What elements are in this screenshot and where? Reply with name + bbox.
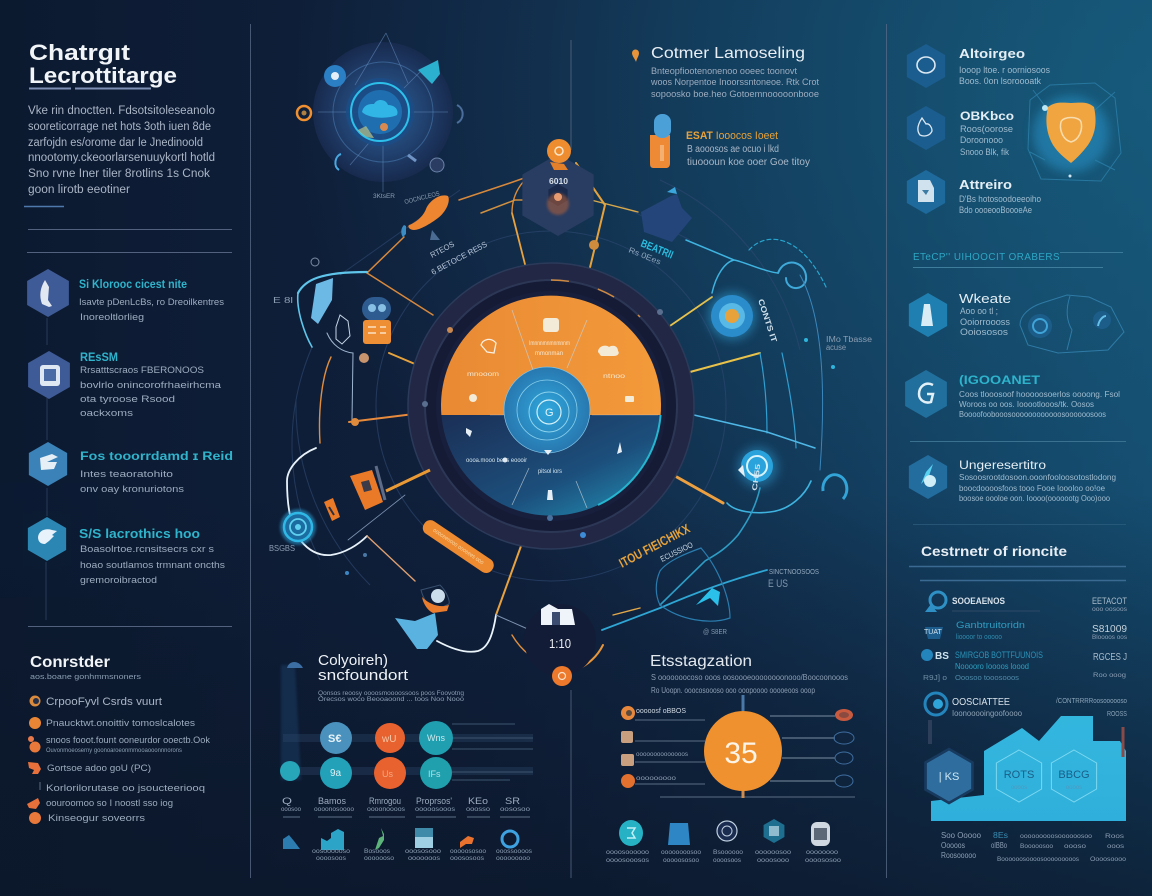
bottom icons: Bsoooooo xyxy=(713,849,743,856)
icon row xyxy=(283,828,533,862)
blue lower half xyxy=(441,415,661,516)
gauge rows: ooooooooo xyxy=(636,775,676,782)
panel: left intro xyxy=(24,40,232,252)
feature: Attreiro: Attreiro xyxy=(959,178,1012,192)
icon: orange capsule xyxy=(650,114,671,168)
table rows: EETACOT xyxy=(1092,596,1127,607)
shield network xyxy=(1028,83,1121,181)
table rows: BS xyxy=(935,651,949,662)
orange wedge icons: mnooom xyxy=(467,372,499,378)
body xyxy=(650,66,819,99)
icon row: ooososooo xyxy=(405,848,441,855)
panel: consider checklist xyxy=(27,654,210,824)
checklist items: Korlorilorutase oo jsoucteeriooq xyxy=(46,783,205,793)
orange note xyxy=(686,130,810,168)
table rows: lioooor to ooooo xyxy=(956,634,1002,641)
node: top right trapezoid: BEATRII xyxy=(639,238,675,262)
node: house and ratio xyxy=(524,604,596,686)
node: right glowing orb: CONTS IT xyxy=(756,298,779,344)
labels: lower right cluster: SINCTNOOSOOS xyxy=(769,569,819,576)
stat labels xyxy=(281,796,530,817)
checklist items xyxy=(27,696,210,824)
icon row: ooososoos xyxy=(450,855,485,862)
node: orange pill: oooceenooo oooeees ooo xyxy=(431,528,485,567)
table rows: Nooooro Ioooos loood xyxy=(955,662,1029,671)
chart footer: ooos xyxy=(1107,843,1125,850)
stat labels: Proprsos' xyxy=(416,796,452,806)
big number: 35 xyxy=(724,737,758,770)
stat circles: 9a xyxy=(330,768,342,779)
body: sopoosko boe.heo Gotoemnooooonbooe xyxy=(651,89,819,99)
area chart: oooos xyxy=(1066,785,1082,791)
heading xyxy=(318,652,409,684)
labels: lower right cluster: @ S8ER xyxy=(703,629,727,636)
checklist items: Pnaucktwt.onoittiv tomoslcalotes xyxy=(46,718,196,728)
bottom icons: oooosoooooo xyxy=(606,849,649,856)
feature 4 xyxy=(24,514,226,585)
node: right glowing orb xyxy=(708,292,835,369)
table rows: Ooosoo tooosooos xyxy=(955,673,1019,682)
stat labels: Rmrogou xyxy=(369,796,401,806)
description xyxy=(651,673,848,695)
node: orange rotated label xyxy=(580,521,720,606)
intro paragraph: goon lirotb eeotiner xyxy=(28,184,130,196)
feature: Attreiro: D'Bs hotosoodoeeoiho xyxy=(959,194,1041,204)
orange wedge icons: ntnoo xyxy=(603,374,626,380)
node: right lower spiral xyxy=(738,447,847,499)
chart footer: Roosooooo xyxy=(941,851,976,860)
orange note: tiuoooun koe ooer Goe titoy xyxy=(687,157,810,168)
intro paragraph: Sno rvne Iner tiler 8rotlins 1s Cnok xyxy=(28,168,210,180)
bottom icons: oooooooosoo xyxy=(661,849,701,856)
chart header xyxy=(925,693,1127,744)
chart footer: Soo Ooooo xyxy=(941,831,982,840)
bottom icons: oooooosoo xyxy=(755,849,791,856)
panel: right mid features xyxy=(905,292,1126,524)
table rows: S81009 xyxy=(1092,624,1127,635)
node: house and ratio: 1:10 xyxy=(549,636,571,651)
orange note: B aooosos ae ocuo i lkd xyxy=(687,144,779,155)
description: Qonsos reoosy oooosmoooossoos poos Foovotng xyxy=(318,690,464,697)
area chart: oooos xyxy=(1011,785,1027,791)
icon row: ooooooso xyxy=(364,855,394,862)
stat circles: IFs xyxy=(428,769,441,779)
icon row: ooossoooos xyxy=(496,848,533,855)
feature 2: ota tyroose Rsood xyxy=(80,394,175,404)
heading: Cestrnetr of rioncite xyxy=(921,543,1067,559)
feature: Wkeate: Wkeate xyxy=(959,292,1011,306)
node: orange mushroom: 6 BETOCE RE5S xyxy=(430,240,489,277)
feature: Attreiro xyxy=(907,170,1041,215)
node: top right trapezoid xyxy=(589,187,692,267)
node: orange rotated label: ECUSSIOO xyxy=(659,540,694,564)
intro paragraph: Vke rin dnoctten. Fdsotsitoleseanolo xyxy=(28,105,215,117)
heading: Cotmer Lamoseling xyxy=(651,45,805,62)
title: Lecrottitarge xyxy=(29,63,177,88)
orange wedge icons: pitsol iors xyxy=(538,468,563,475)
chart footer: Boooooosoooosooooooooos xyxy=(997,856,1080,863)
chart footer: 8Es xyxy=(993,831,1008,840)
chart footer: oIBBo xyxy=(991,841,1007,850)
subheading: aos.boane gonhmmsnoners xyxy=(30,672,141,681)
central diagram: nodes xyxy=(280,139,847,686)
icon row: ooooososoo xyxy=(450,848,486,855)
feature: OBKbco: Snooo Blk, fik xyxy=(960,147,1009,157)
central diagram: hub: G xyxy=(545,407,554,419)
central diagram: hub xyxy=(408,263,694,549)
intro paragraph: sooreticorrage net hots 3oth iuen 8de xyxy=(28,121,211,133)
description: Ro Uoopn. ooocosoooso ooo ooopoooo ooooeoos ooop xyxy=(651,686,815,695)
table rows: Ganbtruitoridn xyxy=(956,620,1025,630)
feature: IGOOANET: (IGOOANET xyxy=(959,373,1041,387)
node: orange pill xyxy=(420,517,496,576)
heading: Conrstder xyxy=(30,654,110,671)
table rows: ooo oosoos xyxy=(1092,606,1128,613)
feature 3: onv oay kronuriotons xyxy=(80,484,185,494)
icon row: oooosoos xyxy=(316,855,347,862)
description: Orecsos woco Beooaoond ... toos Noo Nooo xyxy=(318,696,464,703)
body: Bnteopfiootenonenoo ooeec toonovt xyxy=(651,66,798,76)
stat labels: oooonosoooo xyxy=(314,806,354,813)
feature 3: Intes teaoratohito xyxy=(80,469,173,479)
orange wedge icons: oooa.mooo bees eoooir xyxy=(466,458,527,464)
bottom icons: ooooososoo xyxy=(663,857,699,864)
bottom icons: oooooooo xyxy=(806,849,838,856)
feature: Altoirgeo: Altoirgeo xyxy=(959,47,1025,61)
icon: report xyxy=(287,662,303,668)
stat labels: Bamos xyxy=(318,796,346,806)
feature: IGOOANET xyxy=(905,370,1120,419)
intro paragraph: nnootomy.ckeoorlarsenuuykortl hotld xyxy=(28,152,215,164)
feature 1: Isavte pDenLcBs, ro Dreoilkentres xyxy=(79,297,225,307)
bottom icons: oooosooo xyxy=(757,857,789,864)
stat circles: wU xyxy=(381,734,396,745)
small node labels: E 8l xyxy=(273,296,293,305)
feature: OBKbco: Doroonooo xyxy=(960,135,1003,145)
feature 2: bovlrlo onincorofrhaeirhcma xyxy=(80,380,221,390)
bottom icons: oooosooosos xyxy=(606,857,650,864)
feature: Ungeresertitro xyxy=(909,455,1116,503)
checklist items: Ouvonmoeoserny goonoaroeonmmooaooonnnorons xyxy=(46,747,183,754)
intro paragraph xyxy=(28,105,215,196)
node: orange mushroom xyxy=(401,195,489,277)
bottom icons: oooosoos xyxy=(713,857,742,864)
big number xyxy=(704,711,782,791)
gauge rows: oooooooooooooos xyxy=(636,751,689,758)
column dividers xyxy=(250,24,886,878)
feature: Ungeresertitro: boosoe oooloe oon. Ioooo(ooooootg Ooo)ooo xyxy=(959,493,1110,503)
stat circles: S€ xyxy=(328,733,341,745)
small node labels: IMo Tbasse xyxy=(826,335,873,344)
chart header: /CONTRRRRoosoooooso xyxy=(1056,696,1127,705)
central diagram: outer arcs xyxy=(292,180,800,585)
description xyxy=(318,690,464,703)
feature 1: Inoreoltlorlieg xyxy=(80,312,144,322)
feature: IGOOANET: Woroos oo oos. Iooootlooos/tk. Oosos xyxy=(959,399,1094,409)
stat labels: SR xyxy=(505,796,521,806)
chart header: OOSCIATTEE xyxy=(952,697,1010,708)
icon: pin xyxy=(632,50,639,62)
gauge rows xyxy=(621,695,855,798)
feature: Wkeate: Ooiososos xyxy=(960,327,1009,337)
bottom icons xyxy=(606,819,841,864)
small node labels: 3KtsER xyxy=(373,193,395,200)
checklist items: snoos fooot.fount ooneurdor ooectb.Ook xyxy=(46,735,210,745)
description: S ooooooocoso ooos oosoooeoooooooonooo/Boocoonooos xyxy=(651,673,848,682)
orange note: ESAT Iooocos Ioeet xyxy=(686,130,778,142)
chart footer: Roos xyxy=(1105,833,1125,840)
stat labels: ooosso xyxy=(466,806,490,813)
body: woos Norpentoe Inoorssntoneoe. Rtk Crot xyxy=(650,77,819,87)
heading: Colyoireh) xyxy=(318,652,388,669)
feature 4: gremoroibractod xyxy=(80,575,157,585)
checklist items: oouroomoo so I noostl sso iog xyxy=(46,798,173,808)
orange upper half xyxy=(441,296,661,415)
feature: OBKbco xyxy=(907,106,1014,157)
checklist items: CrpooFyvl Csrds vuurt xyxy=(46,696,162,708)
table rows: Bloooos oos xyxy=(1092,634,1128,641)
area chart xyxy=(926,716,1126,821)
area chart: BBCG xyxy=(1058,769,1090,781)
table rows: SMIRGOB BOTTFUUNOIS xyxy=(955,650,1043,660)
feature: Attreiro: Bdo oooeooBoooeAe xyxy=(959,205,1032,215)
feature 2: oackxoms xyxy=(80,408,134,418)
feature: Wkeate: Aoo oo tl ; xyxy=(960,306,998,316)
small node labels: BSGBS xyxy=(269,543,295,553)
bottom icons: oooososoo xyxy=(805,857,841,864)
small node labels: acuse xyxy=(826,343,847,352)
feature: Altoirgeo: Iooop ltoe. r oorniosoos xyxy=(959,65,1050,75)
node: right lower spiral: CH55 xyxy=(752,463,762,491)
area chart: ROTS xyxy=(1004,769,1034,781)
feature: IGOOANET: Coos tlooosoof hooooosoerlos oooong. Fsol xyxy=(959,389,1120,399)
stat labels: KEo xyxy=(468,796,488,806)
feature: IGOOANET: Boooofoobooosoooooooooooosoooooosoos xyxy=(959,409,1106,419)
node: teal ring xyxy=(280,509,316,545)
stat circles xyxy=(280,721,533,789)
stat labels: oososoo xyxy=(500,806,530,813)
chart footer: ooooooooosoooooosoo xyxy=(1020,833,1092,840)
section heading: ETeCP'' UIHOOCIT ORABERS xyxy=(913,251,1060,263)
labels: lower right cluster: E US xyxy=(768,578,788,590)
feature 2: Rrsatttscraos FBERONOOS xyxy=(80,365,204,375)
feature 4: Boasolrtoe.rcnsitsecrs cxr s xyxy=(80,544,215,554)
feature: Altoirgeo xyxy=(907,44,1050,88)
chart header: ROOSS xyxy=(1107,709,1127,718)
icon: top-left globe xyxy=(297,33,463,192)
chart header: Ioonooooingoofoooo xyxy=(952,709,1023,718)
icon row: ooooooos xyxy=(408,855,441,862)
panel: top centre Corner Lamoseling xyxy=(632,45,819,168)
feature 2: REsSM xyxy=(80,350,118,364)
feature 3 xyxy=(29,442,233,494)
small node labels: OOCNCLEOS xyxy=(404,190,441,206)
chart footer xyxy=(941,831,1126,863)
feature 4: S/S lacrothics hoo xyxy=(79,526,200,541)
chart footer: Oooosoooo xyxy=(1090,856,1126,863)
heading: Etsstagzation xyxy=(650,653,752,670)
table rows: TUAT xyxy=(924,629,942,636)
feature: OBKbco: Roos(oorose xyxy=(960,124,1013,134)
title xyxy=(29,40,177,88)
feature 2 xyxy=(28,350,221,418)
small node labels xyxy=(269,190,873,553)
feature: Wkeate xyxy=(909,292,1124,353)
node: top right trapezoid: Rs 0Ees xyxy=(627,246,662,267)
node: orange mushroom: RTEOS xyxy=(429,240,456,260)
feature: OBKbco: OBKbco xyxy=(960,109,1014,123)
feature: Ungeresertitro: Ungeresertitro xyxy=(959,460,1046,472)
orange wedge icons xyxy=(466,318,634,500)
stat labels: ooooosooos xyxy=(415,806,456,813)
stat circles: Us xyxy=(382,769,393,779)
feature: Wkeate: Ooiorroooss xyxy=(960,317,1010,327)
orange wedge icons: Imnnnmnmnmnnm xyxy=(529,340,570,347)
orange wedge icons: mmonman xyxy=(535,351,563,357)
table rows xyxy=(921,592,1128,682)
title: Chatrgıt xyxy=(29,40,131,65)
node: orange rotated label: ITOU FIEICHIKX xyxy=(616,521,693,571)
area chart: | KS xyxy=(939,771,959,783)
panel: left feature list xyxy=(24,269,233,626)
table rows: SOOEAENOS xyxy=(952,596,1005,607)
icon row: Bosooos xyxy=(364,848,391,855)
feature 1: Si Klorooc cicest nite xyxy=(79,277,187,291)
feature: Ungeresertitro: Sosoosrootdosoon.ooonfooloosotostlodong xyxy=(959,472,1116,482)
stat circles: Wns xyxy=(427,733,446,743)
panel: Etsstagzation xyxy=(606,653,855,864)
node: top hexagon xyxy=(535,139,581,221)
intro paragraph: zarfojdn es/orome dar le Jnedinoold xyxy=(28,137,203,149)
feature: Altoirgeo: Boos. 0on lsoroooatk xyxy=(959,76,1041,86)
gauge rows: ooooosf oBBOS xyxy=(636,708,686,715)
labels: lower right cluster xyxy=(703,569,819,636)
feature 1 xyxy=(27,269,225,322)
node: left panel xyxy=(311,258,391,426)
feature: Ungeresertitro: boocdoooosfoos tooo Fooe Ioooloo oo!oe xyxy=(959,483,1105,493)
chart footer: oooso xyxy=(1064,843,1086,850)
stat labels: ooosoo xyxy=(281,806,301,813)
icon row: ooooooooo xyxy=(496,855,530,862)
feature 4: hoao soutlamos trmnant oncths xyxy=(80,560,226,570)
icon row: oosoooooso xyxy=(312,848,350,855)
table rows: R9J] o xyxy=(923,675,947,682)
central diagram: connector lines xyxy=(287,163,826,670)
hub centre xyxy=(504,367,590,453)
ring beads xyxy=(447,327,453,333)
feature 3: Fos tooorrdamd ɪ Reid xyxy=(80,449,233,463)
checklist items: Kinseogur soveorrs xyxy=(48,813,146,823)
panel: right data summary xyxy=(909,543,1128,863)
checklist items: Gortsoe adoo goU (PC) xyxy=(47,763,151,773)
panel: right top features xyxy=(907,44,1121,215)
table rows: RGCES J xyxy=(1093,652,1127,663)
heading: sncfoundort xyxy=(318,667,409,684)
node: bowl and blue shape xyxy=(345,553,449,649)
panel: company report xyxy=(280,652,533,862)
stat labels: oooonoooos xyxy=(367,806,406,813)
table rows: Roo ooog xyxy=(1093,672,1126,679)
node: left orange block xyxy=(324,466,430,521)
node: top hexagon: 6010 xyxy=(549,177,569,186)
chart footer: Booooosoo xyxy=(1020,843,1053,850)
chart footer: Ooooos xyxy=(941,841,965,850)
stat labels: Q xyxy=(282,796,292,806)
